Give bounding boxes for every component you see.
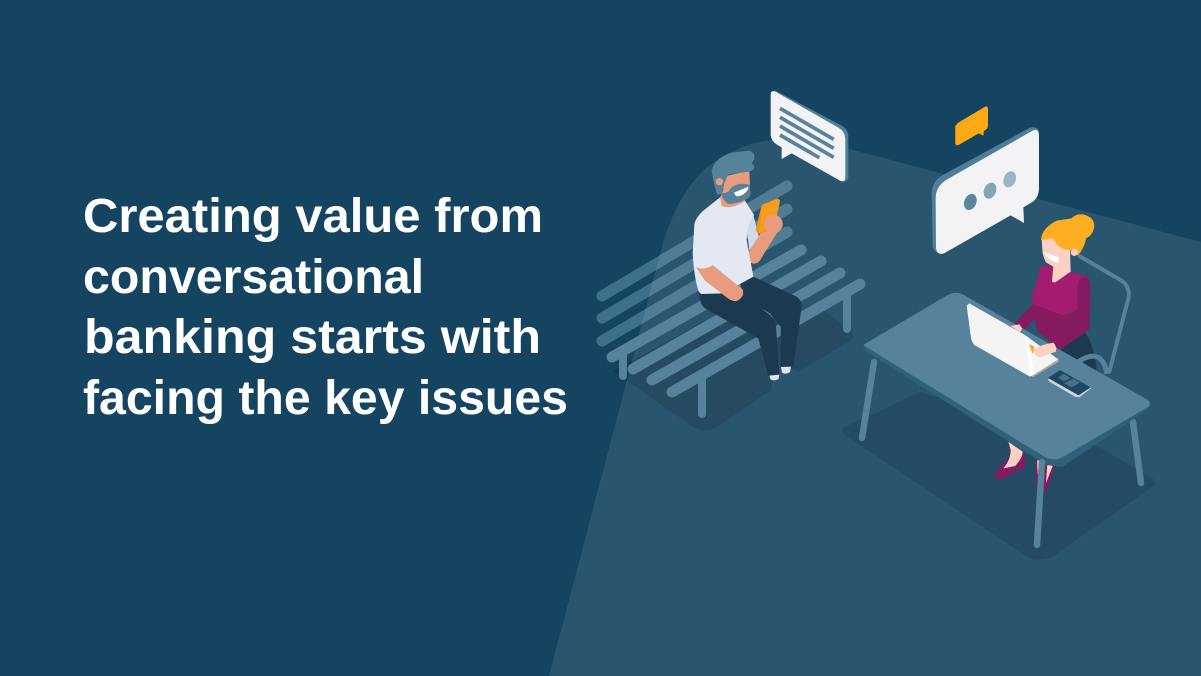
man torso	[693, 197, 754, 294]
man on bench	[693, 151, 802, 380]
woman hands	[1011, 324, 1056, 357]
chair	[1079, 256, 1129, 372]
title: conversational	[83, 251, 424, 304]
man face	[723, 171, 750, 203]
bubble text lines	[780, 108, 834, 158]
man smile	[734, 187, 749, 196]
speech bubble with lines	[771, 89, 848, 181]
woman hair	[1041, 214, 1094, 255]
man left arm	[696, 265, 743, 301]
desk legs	[862, 362, 1141, 483]
man shoes	[769, 367, 791, 380]
man hair	[712, 151, 754, 195]
woman near arm	[1013, 303, 1037, 332]
light cone	[549, 136, 1201, 676]
woman face	[1042, 238, 1071, 283]
man right arm and phone	[747, 198, 783, 257]
laptop keyboard	[1025, 335, 1058, 377]
bench seat	[612, 250, 860, 414]
woman trousers	[1037, 330, 1097, 372]
bench backrest slats	[602, 186, 787, 341]
woman blouse	[1032, 266, 1091, 316]
small orange chat bubble	[955, 107, 988, 146]
woman smile	[1044, 252, 1059, 263]
desk front leg	[1037, 462, 1042, 545]
bubble body	[936, 130, 1039, 254]
woman ear	[1071, 249, 1078, 256]
typing dots	[962, 169, 1018, 212]
man neck	[720, 190, 747, 207]
title: facing the key issues	[83, 372, 568, 425]
laptop	[967, 303, 1059, 377]
laptop screen	[967, 303, 1033, 377]
woman feet	[995, 442, 1054, 498]
man trousers	[699, 277, 802, 376]
desk shadow	[842, 392, 1155, 560]
desk underside	[864, 345, 1150, 467]
phone on desk	[1048, 370, 1091, 397]
bench back shadow	[616, 312, 852, 429]
woman	[1013, 214, 1097, 372]
title	[83, 190, 568, 425]
man beard	[721, 184, 750, 204]
man ear	[716, 178, 723, 185]
title: Creating value from	[83, 190, 543, 243]
chair armrest	[1078, 356, 1107, 374]
desk	[862, 293, 1150, 545]
title: banking starts with	[84, 311, 541, 364]
large typing speech bubble	[932, 127, 1039, 254]
desk top	[864, 293, 1150, 459]
woman blouse shade	[1033, 277, 1091, 353]
bubble depth	[932, 127, 1039, 253]
